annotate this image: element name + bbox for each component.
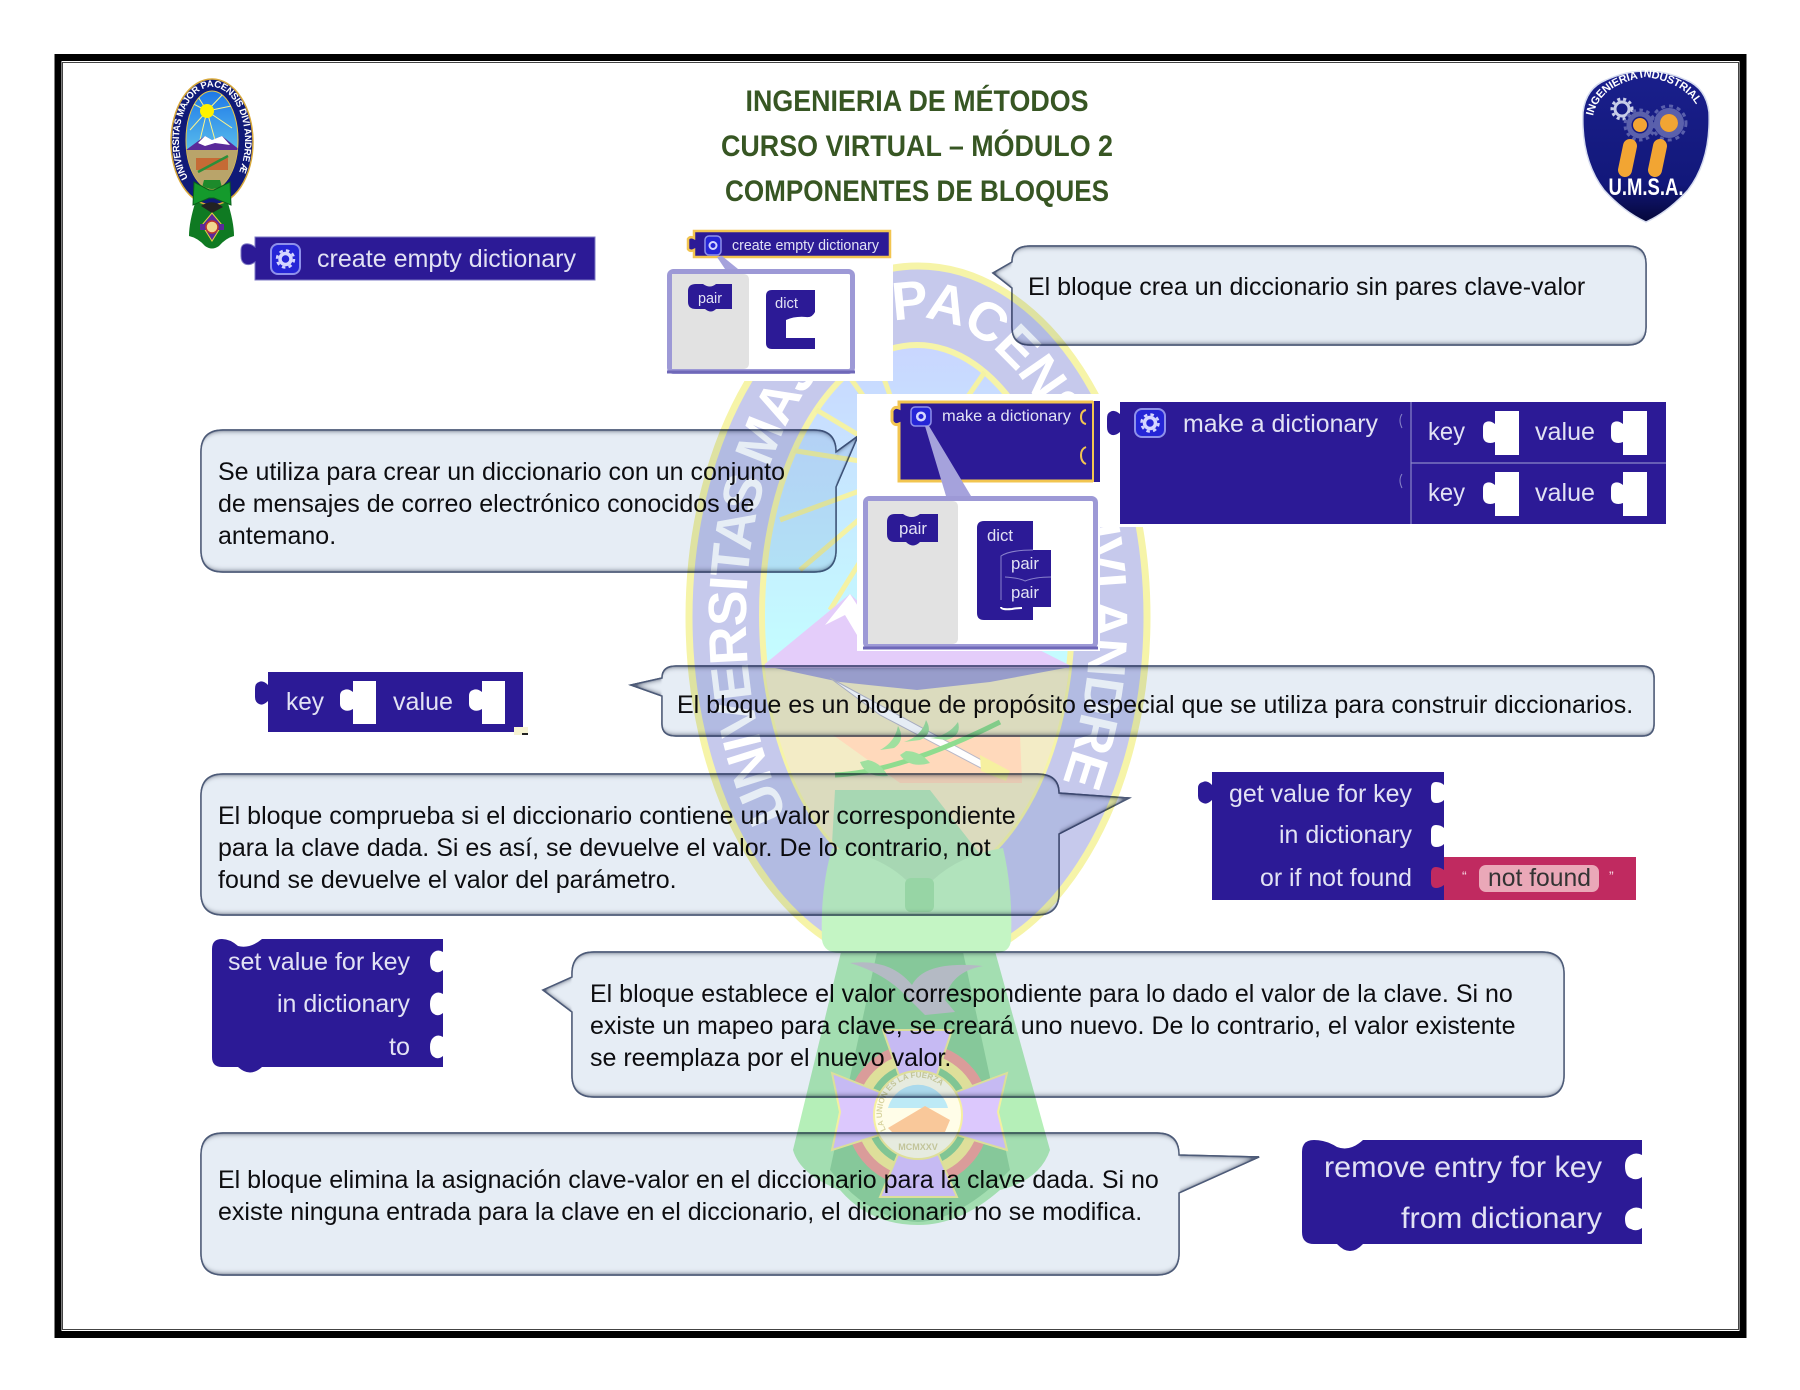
block: get value for key xyxy=(1198,772,1636,900)
callout: comprueba el diccionario: found se devuelve el valor del parámetro. xyxy=(218,866,677,894)
callout: crea un diccionario xyxy=(993,246,1646,345)
callout: crea un diccionario: El bloque crea un diccionario sin pares clave-valor xyxy=(1028,273,1585,301)
callout: elimina la asignación: existe ninguna entrada para la clave en el diccionario, el diccionario no se modifica. xyxy=(218,1198,1142,1226)
callout: elimina la asignación xyxy=(201,1133,1259,1275)
block: create empty dictionary xyxy=(241,237,595,280)
watermark: condor xyxy=(850,962,983,1015)
block: set value for key: to xyxy=(389,1033,410,1061)
title: INGENIERIA DE MÉTODOS xyxy=(746,84,1088,118)
string block: not found xyxy=(1431,857,1636,900)
block: make a dictionary: make a dictionary xyxy=(1183,410,1378,438)
pair row 1 xyxy=(1428,411,1647,455)
watermark: sword and laurel xyxy=(830,678,1010,781)
mutator panel xyxy=(863,498,1098,648)
pair block: pair xyxy=(698,290,722,307)
pair row 2 xyxy=(1428,472,1647,516)
block: set value for key: set value for key xyxy=(228,948,410,976)
callout: conjunto de mensajes: de mensajes de correo electrónico conocidos de xyxy=(218,490,754,518)
title: CURSO VIRTUAL – MÓDULO 2 xyxy=(721,129,1113,163)
block: create empty dictionary: create empty dictionary xyxy=(317,245,576,273)
callout: propósito especial: El bloque es un bloque de propósito especial que se utiliza para construir diccionarios. xyxy=(677,691,1633,719)
mutator pointer xyxy=(717,256,738,269)
pair block: pair xyxy=(899,520,928,538)
logo: UMSA university seal xyxy=(170,78,254,248)
logo: ingeniería industrial shield xyxy=(1582,70,1710,223)
dict block with pairs: pair xyxy=(1011,584,1040,602)
mutator pointer xyxy=(925,426,971,496)
callout: establece el valor xyxy=(543,952,1564,1097)
pair block xyxy=(688,284,732,312)
block: get value for key: or if not found xyxy=(1260,864,1412,892)
block: create empty dictionary selected with mutator xyxy=(667,231,890,372)
watermark: medal: LA UNION ES LA FUERZA xyxy=(876,1072,942,1132)
logo: UMSA university seal: UNIVERSITAS MAJOR PACENSIS DIVI ANDRE Æ xyxy=(172,80,252,180)
callout: conjunto de mensajes xyxy=(201,430,858,572)
icon: gear xyxy=(1135,409,1165,437)
callout: comprueba el diccionario xyxy=(201,774,1129,915)
block: make a dictionary selected with mutator xyxy=(863,401,1100,648)
pair row 1: key xyxy=(1428,418,1465,446)
callout: establece el valor: El bloque establece el valor correspondiente para lo dado el valor de la clave. Si no xyxy=(590,980,1513,1008)
dict block: dict xyxy=(775,295,799,312)
dict block with pairs xyxy=(977,521,1051,620)
watermark: university seal xyxy=(686,262,1150,1225)
logo: ingeniería industrial shield: INGENIERIA INDUSTRIAL xyxy=(1586,70,1700,116)
watermark: green ribbon xyxy=(793,915,1050,1225)
title: COMPONENTES DE BLOQUES xyxy=(725,175,1109,208)
block: create empty dictionary selected with mutator: create empty dictionary xyxy=(732,238,880,254)
callout: establece el valor: se reemplaza por el nuevo valor. xyxy=(590,1044,951,1072)
icon: gear xyxy=(911,407,931,426)
block: key value: key xyxy=(286,688,324,716)
pair block xyxy=(887,514,938,546)
string block: not found: “ xyxy=(1462,868,1467,884)
pair row 2: value xyxy=(1535,479,1595,507)
watermark: bow knot xyxy=(905,878,934,912)
block: key value: value xyxy=(393,688,453,716)
title xyxy=(721,84,1113,208)
watermark: green bow xyxy=(822,848,1011,953)
callout: establece el valor: existe un mapeo para clave, se creará uno nuevo. De lo contrario, el valor existente xyxy=(590,1012,1516,1040)
string block: not found: ” xyxy=(1609,868,1614,884)
callout: propósito especial xyxy=(631,666,1654,736)
screenshot backings xyxy=(665,225,1680,651)
block: key value xyxy=(255,672,528,735)
string block: not found: not found xyxy=(1488,864,1591,892)
block: make a dictionary selected with mutator: make a dictionary xyxy=(942,408,1071,425)
callout: comprueba el diccionario: El bloque comprueba si el diccionario contiene un valor correspondiente xyxy=(218,802,1016,830)
bow xyxy=(193,182,231,205)
block: get value for key: get value for key xyxy=(1229,780,1412,808)
dict block with pairs: pair xyxy=(1011,555,1040,573)
callout: conjunto de mensajes: Se utiliza para crear un diccionario con un conjunto xyxy=(218,458,785,486)
block: get value for key: in dictionary xyxy=(1279,821,1412,849)
block: remove entry for key: from dictionary xyxy=(1401,1202,1602,1235)
block: set value for key: in dictionary xyxy=(277,990,410,1018)
ribbon xyxy=(189,200,234,248)
dict block xyxy=(766,290,815,349)
block: set value for key xyxy=(212,939,443,1072)
watermark: medal xyxy=(830,1029,1008,1198)
callout: elimina la asignación: El bloque elimina la asignación clave-valor en el diccionario para la clave dada. Si no xyxy=(218,1166,1159,1194)
mutator panel xyxy=(667,272,855,372)
pair row 1: value xyxy=(1535,418,1595,446)
pair row 2: key xyxy=(1428,479,1465,507)
block: remove entry for key xyxy=(1302,1140,1642,1251)
icon: gear xyxy=(271,244,300,274)
icon: small gear xyxy=(705,236,721,255)
orange figures xyxy=(1625,114,1678,170)
gears xyxy=(1612,99,1686,140)
callout: comprueba el diccionario: para la clave dada. Si es así, se devuelve el valor. De lo contrario, not xyxy=(218,834,991,862)
callout: conjunto de mensajes: antemano. xyxy=(218,522,336,550)
logo: ingeniería industrial shield: U.M.S.A. xyxy=(1608,174,1684,201)
block: make a dictionary xyxy=(1107,402,1666,524)
block: remove entry for key: remove entry for key xyxy=(1324,1151,1602,1184)
dict block with pairs: dict xyxy=(987,527,1013,545)
watermark: medal: MCMXXV xyxy=(898,1142,938,1152)
